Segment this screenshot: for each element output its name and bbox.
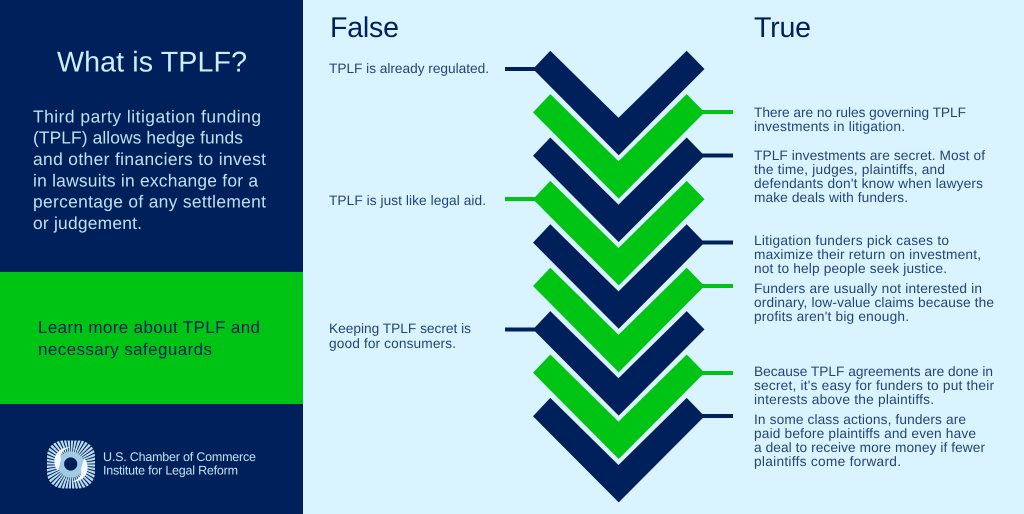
text: false claim 2: TPLF is just like legal aid. bbox=[329, 193, 486, 208]
text: true fact 5 bbox=[754, 364, 994, 407]
text: true fact 3: not to help people seek justice. bbox=[754, 261, 947, 276]
text: true fact 4: Funders are usually not interested in bbox=[754, 281, 982, 296]
panel: learn more callout bbox=[0, 272, 303, 404]
panel: learn more callout: Learn more about TPLF and bbox=[38, 318, 260, 337]
text: true fact 6: In some class actions, funders are bbox=[754, 412, 966, 427]
heading: False: False bbox=[330, 12, 399, 44]
text: true fact 1 bbox=[754, 105, 966, 134]
chevron 7 navy with left connector bbox=[505, 311, 704, 416]
text: organization name bbox=[103, 450, 256, 478]
text: true fact 6: a deal to receive more money if fewer bbox=[754, 440, 985, 455]
text: true fact 2 bbox=[754, 148, 985, 205]
heading: What is TPLF?: What is TPLF? bbox=[57, 46, 247, 78]
text: organization name: Institute for Legal Reform bbox=[103, 464, 238, 478]
text: true fact 4 bbox=[754, 281, 994, 324]
text: false claim 3: good for consumers. bbox=[329, 336, 456, 351]
text: false claim 3: Keeping TPLF secret is bbox=[329, 321, 471, 336]
chevron 5 navy with right connector bbox=[533, 224, 733, 329]
text: true fact 6: plaintiffs come forward. bbox=[754, 454, 901, 469]
text: true fact 3: maximize their return on investment, bbox=[754, 247, 981, 262]
text: true fact 1: investments in litigation. bbox=[754, 119, 905, 134]
chevron 3 navy with right connector bbox=[533, 138, 733, 242]
text: true fact 2: defendants don't know when lawyers bbox=[754, 176, 983, 191]
text: true fact 4: profits aren't big enough. bbox=[754, 309, 909, 324]
text block: TPLF definition bbox=[33, 106, 266, 233]
text: true fact 6 bbox=[754, 412, 985, 469]
text: true fact 1: There are no rules governing TPLF bbox=[754, 105, 966, 120]
chevron 6 green with right connector bbox=[533, 268, 733, 372]
text block: TPLF definition: (TPLF) allows hedge funds bbox=[33, 128, 243, 148]
chevron 2 green with right connector bbox=[533, 94, 733, 199]
text block: TPLF definition: and other financiers to invest bbox=[33, 149, 266, 169]
text block: TPLF definition: in lawsuits in exchange for a bbox=[33, 170, 258, 190]
text: true fact 2: TPLF investments are secret. Most of bbox=[754, 148, 985, 163]
text block: TPLF definition: Third party litigation funding bbox=[33, 106, 261, 126]
panel: what is TPLF bbox=[0, 0, 303, 272]
chevron 8 green with right connector bbox=[533, 354, 733, 459]
text: true fact 5: interests above the plaintiffs. bbox=[754, 392, 934, 407]
text: true fact 5: secret, it's easy for funders to put their bbox=[754, 378, 994, 393]
text block: TPLF definition: percentage of any settlement bbox=[33, 192, 266, 212]
text: false claim 3 bbox=[329, 321, 471, 351]
text: false claim 1: TPLF is already regulated. bbox=[329, 61, 489, 76]
text: organization name: U.S. Chamber of Commerce bbox=[103, 450, 256, 464]
text: true fact 5: Because TPLF agreements are done in bbox=[754, 364, 993, 379]
chevron 9 navy with right connector bbox=[533, 398, 733, 502]
text: true fact 4: ordinary, low-value claims because the bbox=[754, 295, 994, 310]
text: true fact 2: make deals with funders. bbox=[754, 190, 908, 205]
text: true fact 2: the time, judges, plaintiffs, and bbox=[754, 162, 945, 177]
panel: logo footer bbox=[0, 404, 303, 514]
heading: True: True bbox=[754, 12, 811, 44]
icon: chamber sunburst logo bbox=[51, 444, 91, 484]
text: true fact 6: paid before plaintiffs and even have bbox=[754, 426, 976, 441]
chart: stacked chevrons with connectors bbox=[505, 51, 733, 502]
chevron 4 green with left connector bbox=[505, 181, 704, 285]
text: true fact 3: Litigation funders pick cases to bbox=[754, 233, 949, 248]
text: true fact 3 bbox=[754, 233, 981, 276]
chevron 1 navy with left connector bbox=[505, 51, 704, 155]
panel: learn more callout: necessary safeguards bbox=[38, 340, 212, 359]
text block: TPLF definition: or judgement. bbox=[33, 213, 142, 233]
